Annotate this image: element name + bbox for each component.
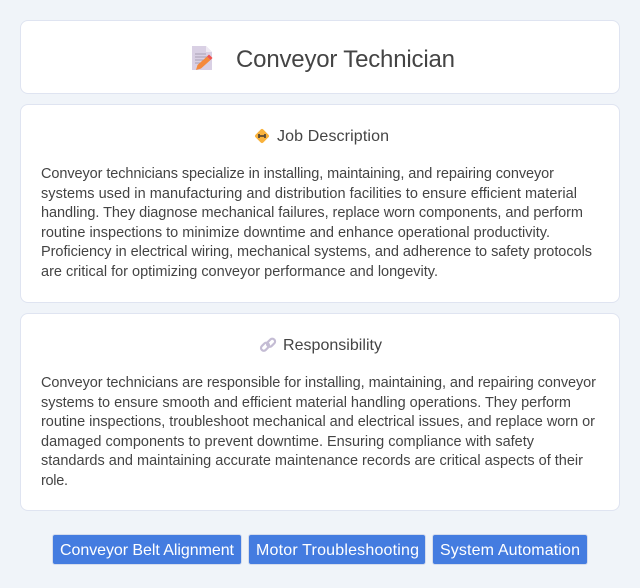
text block: responsibility: Conveyor technicians are responsible for installing, maintaining, and repairing conveyor	[41, 375, 596, 391]
title: Conveyor Technician	[236, 46, 455, 73]
text block: job description: routine inspections to minimize downtime and enhance operational productivity.	[41, 225, 550, 241]
text block: responsibility: systems to ensure smooth and efficient material handling operations. They perform	[41, 395, 571, 411]
text block: responsibility: damaged components to prevent downtime. Ensuring compliance with safety	[41, 434, 535, 450]
text block: responsibility: role.	[41, 473, 68, 489]
tag: system automation	[432, 534, 588, 565]
panel: responsibility	[20, 313, 620, 511]
heading: job description: Job Description	[277, 128, 389, 145]
text block: job description: handling. They diagnose mechanical failures, replace worn components, and perform	[41, 205, 583, 221]
tag: conveyor belt alignment: Conveyor Belt Alignment	[60, 542, 235, 559]
icon: road sign diamond	[255, 128, 269, 144]
icon: document with pencil	[192, 46, 212, 70]
tag: motor troubleshooting: Motor Troubleshooting	[256, 542, 419, 559]
text block: job description: systems used in manufacturing and distribution facilities to ensure efficient material	[41, 186, 577, 202]
heading: responsibility: Responsibility	[283, 337, 382, 354]
text block: responsibility: routine inspections, troubleshoot mechanical and electrical issues, and replace worn or	[41, 414, 595, 430]
panel: job description	[20, 104, 620, 303]
text block: job description: Proficiency in electrical wiring, mechanical systems, and adherence to safety protocols	[41, 244, 592, 260]
text block: job description: are critical for optimizing conveyor performance and longevity.	[41, 264, 438, 280]
tag: system automation: System Automation	[440, 542, 580, 559]
tag: motor troubleshooting	[248, 534, 426, 565]
text block: responsibility	[41, 375, 596, 489]
icon: chain link	[260, 338, 276, 352]
tag: conveyor belt alignment	[52, 534, 242, 565]
text block: job description: Conveyor technicians specialize in installing, maintaining, and repairing conveyor	[41, 166, 554, 182]
text block: responsibility: standards and maintaining accurate maintenance records are critical aspects of their	[41, 453, 583, 469]
panel: title card	[20, 20, 620, 94]
text block: job description	[41, 166, 592, 280]
